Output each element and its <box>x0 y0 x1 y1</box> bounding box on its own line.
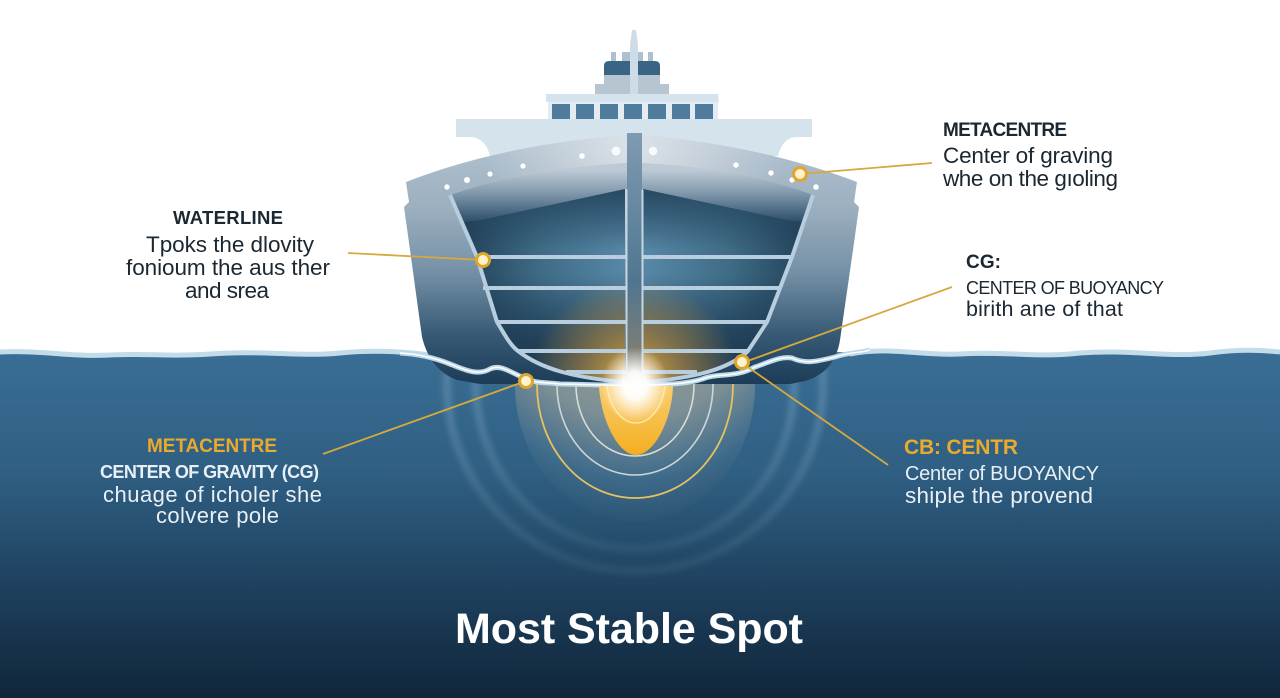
callout: metacentre top right: METACENTRE <box>943 120 1067 141</box>
callout: waterline: Tpoks the dlovity <box>146 232 315 257</box>
callout: metacentre and centre of gravity: METACENTRE <box>147 436 277 457</box>
callout: centre of buoyancy <box>904 436 1099 508</box>
callout: metacentre top right <box>942 120 1118 191</box>
stable spot glow <box>599 347 673 455</box>
hull interior compartments <box>444 133 820 385</box>
callout: metacentre and centre of gravity <box>100 436 322 528</box>
callout: waterline: fonioum the aus ther <box>126 255 330 280</box>
callout: CG: birith ane of that <box>966 297 1123 321</box>
callout: centre of buoyancy: Center of BUOYANCY <box>905 463 1099 485</box>
callout: centre of buoyancy: CB: CENTR <box>904 436 1018 459</box>
callout: CG: CENTER OF BUOYANCY <box>966 278 1164 298</box>
callout: metacentre and centre of gravity: colvere pole <box>156 503 279 528</box>
callout: metacentre top right: whe on the gıoling <box>942 166 1118 191</box>
waterline across hull <box>400 350 870 385</box>
ship superstructure <box>456 30 812 156</box>
callout: metacentre and centre of gravity: CENTER OF GRAVITY (CG) <box>100 462 319 482</box>
stability ripple rings <box>442 368 828 572</box>
callout: waterline: WATERLINE <box>173 207 283 228</box>
callout lines and markers <box>323 163 952 465</box>
callout: centre of buoyancy: shiple the provend <box>905 483 1093 508</box>
portholes <box>444 146 819 190</box>
callout: metacentre and centre of gravity: chuage of icholer she <box>103 482 322 507</box>
callout: CG <box>966 252 1164 321</box>
callout: waterline <box>126 207 330 303</box>
title: Most Stable Spot <box>455 605 803 653</box>
callout: waterline: and srea <box>185 278 269 303</box>
ship hull <box>404 135 859 384</box>
frame and shelves <box>450 195 813 383</box>
panel: sea background <box>0 350 1280 698</box>
callout: CG: CG: <box>966 252 1001 273</box>
centre keel <box>626 133 642 383</box>
callout: metacentre top right: Center of graving <box>943 143 1113 168</box>
